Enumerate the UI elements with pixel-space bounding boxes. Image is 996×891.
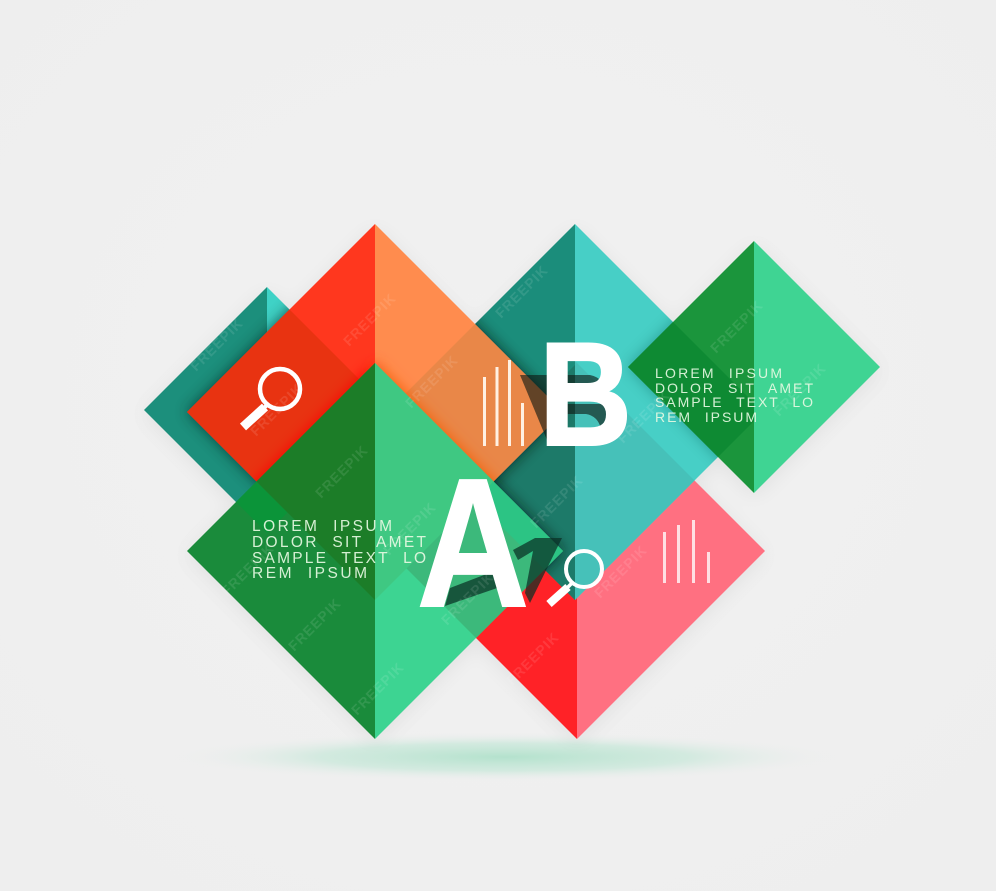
pink and red diamond xyxy=(389,363,765,739)
text block: right green diamond: DOLOR SIT AMET xyxy=(655,380,813,396)
icon: bar chart on orange xyxy=(483,360,524,446)
overlap: red over small teal xyxy=(187,310,375,512)
letter B shadow xyxy=(520,375,610,440)
watermarks: FREEPIK xyxy=(503,629,562,688)
watermarks: FREEPIK xyxy=(614,387,673,446)
watermarks: FREEPIK xyxy=(247,380,306,439)
text block: large green diamond: SAMPLE TEXT LO xyxy=(252,550,426,567)
watermarks: FREEPIK xyxy=(285,595,344,654)
icon: bar chart on pink xyxy=(663,520,710,583)
watermarks: FREEPIK xyxy=(707,297,766,356)
watermarks: FREEPIK xyxy=(340,290,399,349)
shadows on teal xyxy=(475,318,718,576)
text block: large green diamond xyxy=(252,518,427,582)
letter A shadow xyxy=(445,538,562,606)
overlap: green over red xyxy=(256,363,375,600)
icon: magnifier on pink and teal xyxy=(549,551,602,604)
text block: right green diamond: SAMPLE TEXT LO xyxy=(655,394,813,410)
watermarks: FREEPIK xyxy=(591,542,650,601)
text block: large green diamond: DOLOR SIT AMET xyxy=(252,534,427,551)
watermarks: FREEPIK xyxy=(218,540,277,599)
watermarks: FREEPIK xyxy=(770,360,829,419)
watermarks: FREEPIK xyxy=(492,262,551,321)
shadow from green diamond on red xyxy=(252,358,499,482)
large teal diamond xyxy=(475,224,718,600)
soft drop shadows xyxy=(144,228,880,743)
watermarks: FREEPIK xyxy=(348,659,407,718)
overlap: green over pink xyxy=(389,464,563,638)
text block: right green diamond xyxy=(655,365,813,425)
text block: right green diamond: LOREM IPSUM xyxy=(655,365,782,381)
overlap: green over small teal xyxy=(236,482,288,533)
watermarks: FREEPIK xyxy=(438,569,497,628)
watermarks: FREEPIK xyxy=(402,352,461,411)
watermarks: FREEPIK xyxy=(312,442,371,501)
infographic canvas xyxy=(144,224,880,776)
watermarks xyxy=(187,262,829,718)
text block: large green diamond: REM IPSUM xyxy=(252,565,367,582)
watermarks: FREEPIK xyxy=(380,499,439,558)
small teal diamond xyxy=(144,287,290,502)
letter B: B xyxy=(540,312,632,476)
overlap: green over orange xyxy=(375,363,494,600)
icon: magnifier on red xyxy=(243,369,300,427)
ground shadow xyxy=(170,732,840,782)
red and orange diamond xyxy=(187,224,547,482)
watermarks: FREEPIK xyxy=(527,472,586,531)
large green diamond xyxy=(187,363,563,739)
watermarks: FREEPIK xyxy=(187,315,246,374)
overlap: green over teal xyxy=(475,482,563,570)
right green diamond xyxy=(628,241,880,493)
overlap: teal over pink xyxy=(457,361,694,600)
text block: right green diamond: REM IPSUM xyxy=(655,409,757,425)
overlap: orange over teal xyxy=(387,324,563,500)
text block: large green diamond: LOREM IPSUM xyxy=(252,518,392,535)
letter A: A xyxy=(417,440,529,645)
overlap: green over teal xyxy=(628,322,754,457)
